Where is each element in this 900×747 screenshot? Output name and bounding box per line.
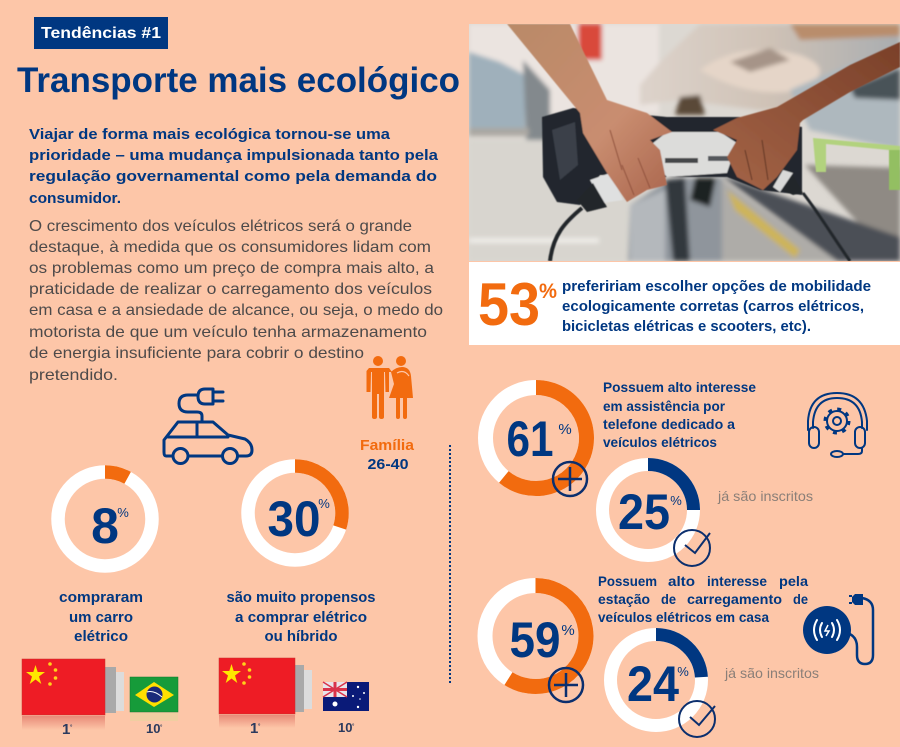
donut: 59 percent	[485, 586, 586, 702]
family label	[360, 437, 415, 473]
body paragraph: motorista de que um veículo tenha armazenamento	[29, 324, 427, 341]
body paragraph: em casa e a ansiedade de alcance, ou seja, o medo do	[29, 302, 443, 319]
intro bold text: consumidor.	[29, 190, 121, 207]
flag: Australia	[323, 682, 369, 711]
caption: bought electric: elétrico	[74, 628, 128, 645]
text: home charging interest: carregamento	[687, 591, 782, 607]
text: home charging interest: estação	[598, 591, 650, 607]
donut: 8 percent: %	[117, 505, 129, 520]
donut: 24 percent: %	[677, 664, 689, 679]
callout text: ecologicamente corretas (carros elétricos,	[562, 298, 864, 315]
text: home charging interest: de	[793, 591, 808, 607]
caption: very likely to buy: ou híbrido	[264, 628, 338, 645]
text: home charging interest: pela	[779, 573, 808, 589]
text: phone assistance interest: Possuem alto interesse	[603, 379, 756, 395]
rank labels: 1	[62, 721, 70, 738]
body paragraph: O crescimento dos veículos elétricos será o grande	[29, 218, 412, 235]
donut: 25 percent: 25	[618, 484, 670, 540]
flag: China	[22, 659, 124, 730]
donut: 59 percent: 59	[510, 612, 560, 668]
text: home charging interest: alto	[668, 573, 695, 589]
body paragraph: pretendido.	[29, 367, 118, 384]
icon: plus	[549, 668, 583, 702]
body paragraph: destaque, à medida que os consumidores lidam com	[29, 239, 431, 256]
text: home charging interest: de	[661, 591, 676, 607]
donut: 61 percent: 61	[506, 411, 554, 467]
icon: headset with gear	[808, 393, 867, 457]
rank labels	[62, 721, 163, 738]
caption: very likely to buy: são muito propensos	[226, 589, 376, 606]
flag: Brazil	[130, 677, 178, 721]
section tag: Tendências #1	[41, 25, 161, 42]
family label: Família	[360, 437, 415, 454]
intro bold text: prioridade – uma mudança impulsionada tanto pela	[29, 147, 439, 164]
donut: 59 percent: %	[561, 622, 575, 639]
rank labels: °	[70, 725, 73, 731]
rank labels: °	[258, 724, 261, 730]
rank labels: °	[352, 724, 355, 730]
caption: bought electric: um carro	[69, 609, 133, 626]
body paragraph	[29, 218, 443, 384]
flag: China	[219, 658, 312, 728]
section tag	[34, 17, 168, 49]
donut: 25 percent: %	[670, 493, 682, 508]
donut: 24 percent	[610, 634, 715, 737]
intro bold text: Viajar de forma mais ecológica tornou-se uma	[29, 126, 391, 143]
callout text: prefeririam escolher opções de mobilidade	[562, 278, 871, 295]
rank labels: 10	[146, 721, 160, 736]
rank labels: °	[160, 725, 163, 731]
ranking: China 1st, Brazil 10th	[22, 659, 178, 738]
title: Transporte mais ecológico	[17, 61, 460, 100]
text: phone assistance interest: veículos elétricos	[603, 434, 717, 450]
icon: check	[674, 530, 710, 566]
body paragraph: praticidade de realizar o carregamento dos veículos	[29, 281, 432, 298]
text: home charging interest: veículos elétricos em casa	[598, 609, 769, 625]
text: home charging interest: Possuem	[598, 573, 657, 589]
donut: 25 percent	[602, 464, 710, 566]
rank labels: 1	[250, 720, 258, 737]
donut: 30 percent: 30	[268, 491, 320, 547]
intro bold text: regulação governamental como pela demanda do	[29, 168, 437, 185]
stat: 53 percent: %	[539, 280, 557, 303]
donut: 30 percent	[248, 466, 342, 560]
icon: plus	[553, 462, 587, 496]
donut: 61 percent	[486, 387, 587, 496]
body paragraph: os problemas como um preço de compra mais alto, a	[29, 260, 434, 277]
caption: bought electric	[59, 589, 143, 645]
family label: 26-40	[368, 456, 408, 473]
text: phone assistance interest: em assistência por	[603, 398, 726, 414]
ranking: China 1st, Australia 10th	[219, 658, 369, 737]
caption: very likely to buy: a comprar elétrico	[235, 609, 367, 626]
body paragraph: de energia insuficiente para cobrir o destino	[29, 345, 364, 362]
label: already subscribed: já são inscritos	[717, 488, 813, 504]
icon: electric car with plug	[164, 389, 252, 464]
donut: 61 percent: %	[558, 421, 572, 438]
intro bold text	[29, 126, 439, 207]
icon: check	[679, 701, 715, 737]
rank labels: 10	[338, 720, 352, 735]
photo: hands plugging in an electric car	[469, 24, 900, 261]
callout text: bicicletas elétricas e scooters, etc).	[562, 318, 811, 335]
text: home charging interest	[598, 573, 808, 625]
donut: 30 percent: %	[318, 496, 330, 511]
icon: family	[366, 356, 413, 419]
panel: 53% callout	[469, 262, 900, 345]
label: already subscribed: já são inscritos	[724, 665, 819, 681]
donut: 24 percent: 24	[627, 656, 679, 712]
donut: 8 percent: 8	[91, 498, 119, 554]
caption: very likely to buy	[226, 589, 376, 645]
text: phone assistance interest: telefone dedicado a	[603, 416, 735, 432]
donut: 8 percent	[58, 472, 152, 566]
rank labels	[250, 720, 355, 737]
text: phone assistance interest	[603, 379, 756, 450]
text: home charging interest: interesse	[707, 573, 767, 589]
callout text	[562, 278, 871, 335]
caption: bought electric: compraram	[59, 589, 143, 606]
dotted divider	[449, 445, 451, 685]
icon: wireless charger	[803, 594, 873, 664]
stat: 53 percent: 53	[478, 271, 540, 338]
